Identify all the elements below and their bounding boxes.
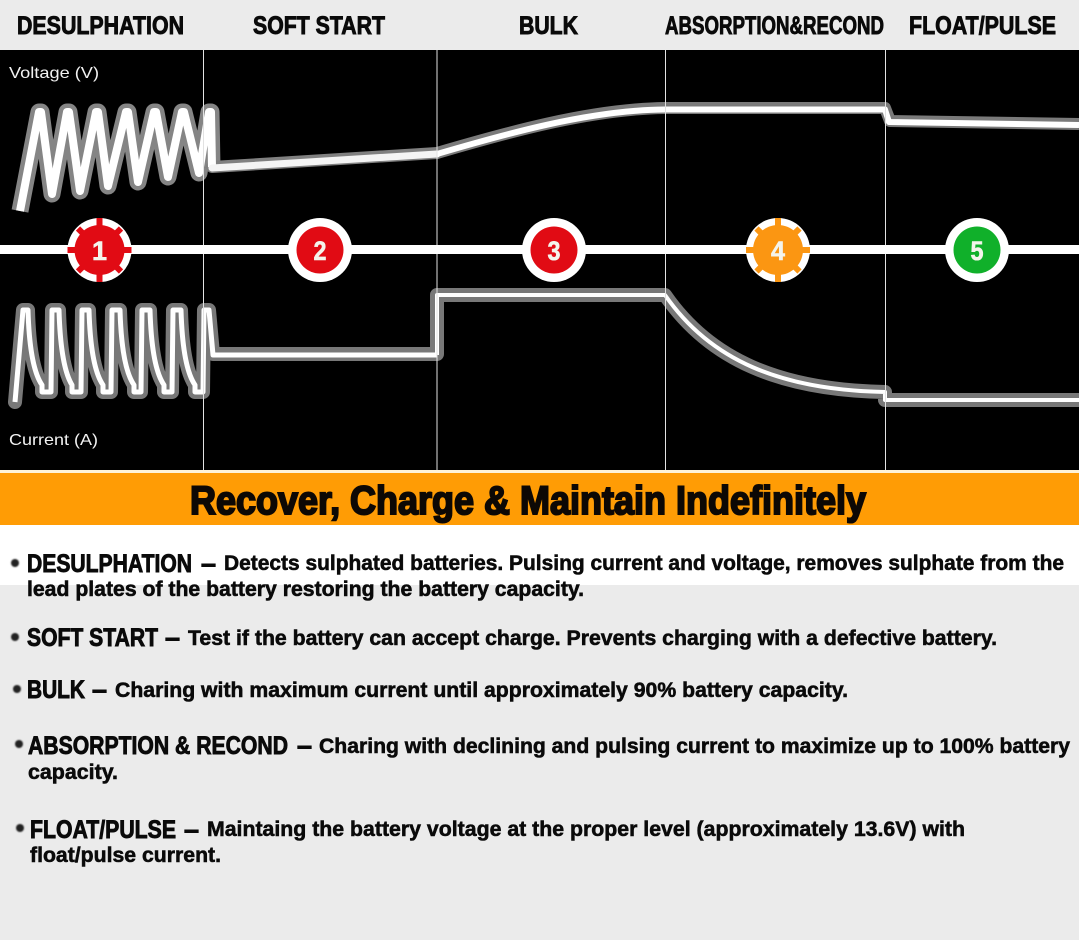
item: soft start [11, 624, 997, 652]
axis label: voltage: Voltage (V) [9, 65, 99, 82]
stage dividers [204, 50, 886, 470]
step marker 5 [945, 218, 1009, 282]
panel: charging chart [0, 50, 1079, 470]
voltage curve [20, 108, 1079, 211]
stage headings [17, 12, 1056, 40]
item: absorption and recond [15, 732, 1070, 784]
item: float pulse: Maintaing the battery voltage at the proper level (approximately 13.6V) with [207, 818, 965, 841]
item: desulphation: lead plates of the battery restoring the battery capacity. [27, 578, 584, 601]
step marker 3: 3 [548, 236, 560, 266]
item: bulk: – [92, 676, 107, 704]
item: float pulse [16, 816, 965, 867]
item: desulphation [11, 550, 1064, 601]
item: absorption and recond: Charing with declining and pulsing current to maximize up to 100% battery [319, 735, 1070, 758]
item: float pulse: float/pulse current. [30, 844, 221, 867]
step marker 4: 4 [771, 236, 785, 266]
step marker 2: 2 [314, 236, 326, 266]
axis label: current: Current (A) [9, 432, 98, 449]
step marker 2 [288, 218, 352, 282]
step marker 1: 1 [92, 236, 107, 266]
item: soft start: SOFT START [27, 624, 158, 652]
stage headings: BULK [519, 12, 578, 40]
step marker 1 [68, 218, 132, 282]
title banner [0, 470, 1079, 525]
item: soft start: Test if the battery can accept charge. Prevents charging with a defective battery. [188, 627, 997, 650]
step marker 4 [746, 218, 810, 282]
title banner: Recover, Charge & Maintain Indefinitely [190, 479, 867, 523]
step marker 5: 5 [970, 236, 984, 266]
item: bulk: Charing with maximum current until approximately 90% battery capacity. [115, 679, 848, 702]
item: desulphation: Detects sulphated batteries. Pulsing current and voltage, removes sulphate from the [224, 552, 1064, 575]
stage headings: FLOAT/PULSE [909, 12, 1056, 40]
item: desulphation: – [201, 550, 216, 578]
item: soft start: – [165, 624, 180, 652]
item: desulphation: DESULPHATION [27, 550, 192, 578]
item: float pulse: – [184, 816, 199, 844]
step marker 3 [522, 218, 586, 282]
stage headings: DESULPHATION [17, 12, 184, 40]
item: absorption and recond: ABSORPTION & RECOND [28, 732, 288, 760]
item: absorption and recond: capacity. [28, 761, 118, 784]
item: absorption and recond: – [297, 732, 312, 760]
item: bulk: BULK [27, 676, 85, 704]
timeline [0, 245, 1079, 254]
item: float pulse: FLOAT/PULSE [30, 816, 176, 844]
current curve [15, 295, 1079, 402]
stage headings: SOFT START [253, 12, 385, 40]
stage headings: ABSORPTION&RECOND [665, 12, 884, 40]
